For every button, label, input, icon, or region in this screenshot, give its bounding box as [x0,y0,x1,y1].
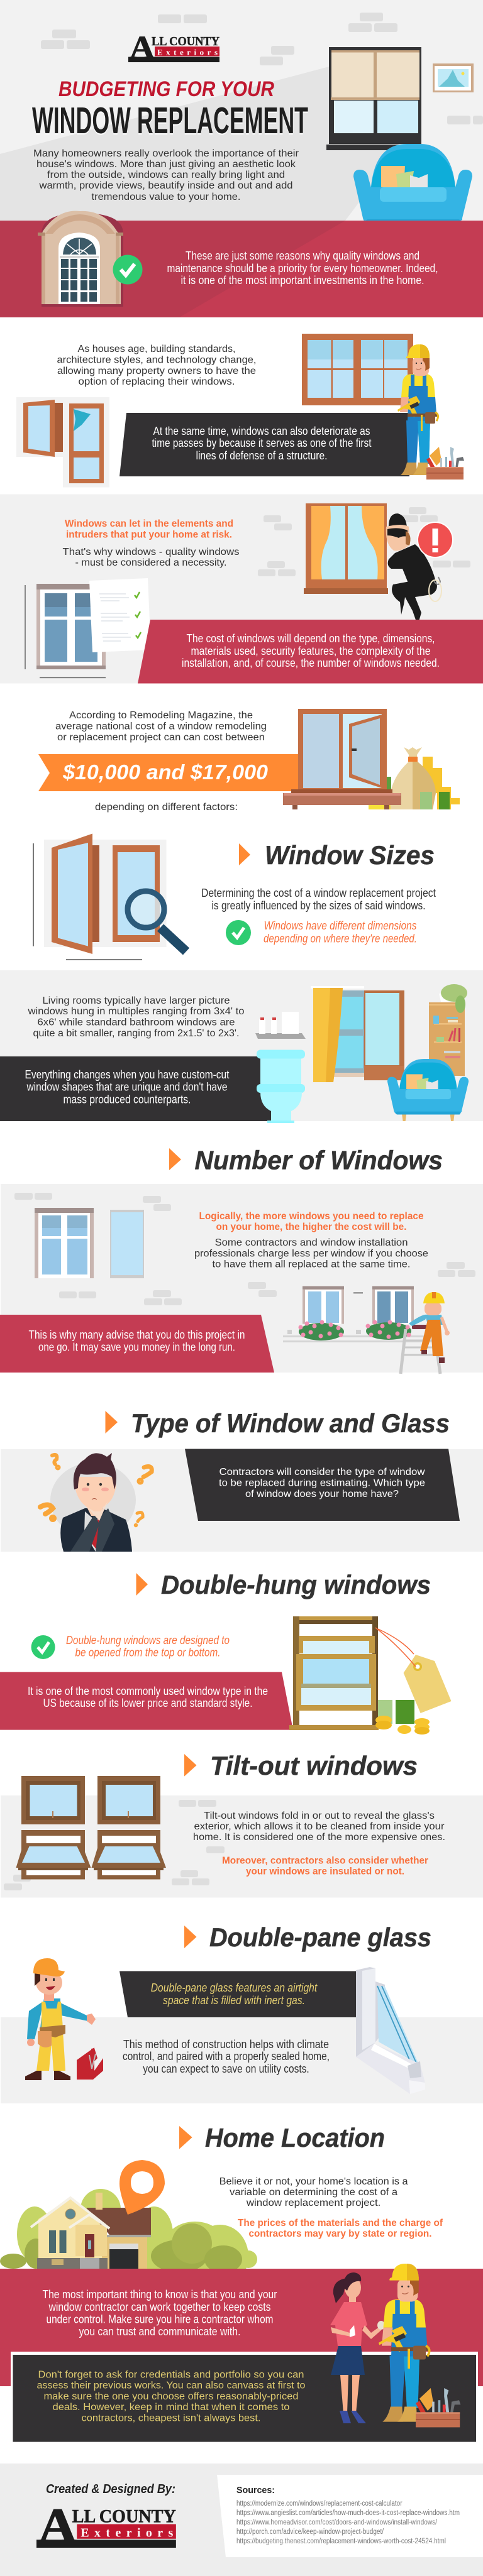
title [32,77,308,143]
text: insulated or not: your windows are insulated or not. [246,1866,404,1877]
illustration: arched window [38,211,123,307]
callout: dark inert gas box [119,1971,357,2017]
panel: double-pane background [1,2017,483,2103]
red band text [167,249,438,287]
illustration: house with trees [0,2189,257,2288]
title: BUDGETING FOR YOUR [58,77,274,101]
heading: tilt-out windows: Tilt-out windows [210,1751,418,1780]
callout: dark contractors box: Contractors will consider the type of window [219,1467,425,1477]
red band text: maintenance should be a priority for every homeowner. Indeed, [167,262,438,275]
text: sources: http://porch.com/advice/keep-window-project-budget/ [236,2528,384,2536]
text: as houses age: architecture styles, and technology change, [57,354,257,366]
text: different dimensions: depending on where they're needed. [264,932,417,945]
heading: double-hung windows: Double-hung windows [161,1570,431,1599]
logo: All County Exteriors footer: Exteriors [80,2526,174,2540]
text: contractors charge less: professionals charge less per window if you choose [194,1248,428,1259]
text: tilt-out description: home. It is considered one of the more expensive ones. [193,1832,445,1843]
illustration: window sizes [33,833,166,960]
panel: security section background [0,494,483,684]
illustration: woman homeowner [330,2272,385,2423]
logo: All County Exteriors footer: LL COUNTY [72,2506,176,2526]
text: tilt-out description [193,1811,445,1843]
illustration: two windows [35,1208,144,1278]
text: designed to be opened [66,1634,230,1659]
panel: type of window background [1,1449,483,1552]
text: work together [43,2288,277,2338]
intro text: tremendous value to your home. [92,192,240,202]
text: believe it or not: Believe it or not, your home's location is a [219,2176,408,2187]
heading: created and designed by: Created & Designed By: [46,2482,175,2496]
text: according to remodeling magazine: or replacement project can can cost between [57,732,265,743]
heading: double-pane glass: Double-pane glass [209,1922,431,1952]
illustration: open window on sill [283,709,401,809]
heading: number of windows: Number of Windows [195,1146,443,1175]
text: as houses age: allowing many property owners to have the [57,366,256,376]
intro text: from the outside, windows can really bring light and [47,170,285,180]
bricks: header wall [41,13,483,124]
panel: header background [0,0,483,221]
text: determining cost: is greatly influenced by the sizes of said windows. [211,899,425,912]
illustration: worker with orange hard hat [25,1958,96,2080]
text: believe it or not: variable on determining the cost of a [230,2187,397,2198]
text: different dimensions [264,919,417,945]
illustration: facade with flower boxes [283,1286,434,1342]
intro text: warmth, provide views, beautify inside and out and add [38,180,293,191]
text: prices vary: The prices of the materials and the charge of [238,2218,443,2228]
text: different dimensions: Windows have different dimensions [264,919,416,932]
text: believe it or not [219,2176,408,2208]
illustration: small armchair [387,1059,469,1121]
text: prices vary: contractors may vary by state or region. [249,2228,431,2239]
illustration: toilet [257,1050,305,1123]
text: logically [199,1211,424,1232]
illustration: window with shade [326,47,421,150]
text: logically: Logically, the more windows you need to replace [199,1211,424,1222]
callout: red cost box: materials used, security features, the complexity of the [191,645,430,657]
text: according to remodeling magazine [55,710,267,743]
bricks: tilt-out wall [4,1800,225,1890]
callout: red commonly used box: US because of its lower price and standard style. [43,1697,253,1709]
text: designed to be opened: be opened from the top or bottom. [75,1647,220,1659]
text: according to remodeling magazine: According to Remodeling Magazine, the [69,710,253,721]
text: logically: on your home, the higher the cost will be. [216,1222,406,1232]
callout: dark inert gas box: Double-pane glass features an airtight [151,1981,318,1994]
callout: dark contractors box: to be replaced during estimating. Which type [219,1478,425,1488]
illustration: bathroom shelf [255,1012,306,1039]
logo: All County Exteriors: A [130,30,155,66]
heading: type of window and glass: Type of Window and Glass [131,1408,450,1438]
icon: location pin [119,2160,165,2215]
icon: question marks [40,1455,152,1526]
logo: All County Exteriors: LL COUNTY [152,35,220,48]
text: depending on factors: depending on different factors: [95,802,238,813]
text: contractors charge less: to have them all replaced at the same time. [213,1259,410,1270]
text: work together: The most important thing to know is that you and your [43,2288,277,2301]
text: intruders warning: Windows can let in the elements and [65,518,233,529]
text: living rooms: windows hung in multiples ranging from 3x4' to [27,1006,245,1017]
illustration: construction worker [397,344,438,475]
callout: red cost box [138,620,483,684]
title: WINDOW REPLACEMENT [32,100,308,141]
text: work together: window contractor can work together to keep costs [48,2301,270,2313]
text: designed to be opened: Double-hung windows are designed to [66,1634,230,1647]
illustration: burglar [386,513,441,625]
heading: window sizes: Window Sizes [265,840,435,870]
illustration: checklist paper [89,578,151,652]
heading: home location: Home Location [205,2123,385,2152]
logo: All County Exteriors: Exteriors [157,48,218,57]
intro text: Many homeowners really overlook the importance of their [33,148,299,159]
illustration: price tag and money [375,1628,452,1735]
panel: tilt-out background [1,1795,483,1898]
callout: red cost box: The cost of windows will depend on the type, dimensions, [186,632,435,645]
illustration: worker on ladder [401,1292,450,1374]
text: contractors charge less [194,1237,428,1270]
text: tilt-out description: Tilt-out windows fold in or out to reveal the glass's [204,1811,435,1821]
text: insulated or not: Moreover, contractors also consider whether [222,1855,428,1866]
callout: dark inert gas box: space that is filled with inert gas. [163,1994,305,2007]
text: prices vary [238,2218,443,2239]
text: sources: https://budgeting.thenest.com/replacement-windows-worth-cost-24524.html [236,2538,446,2545]
callout: dark box deterioration: At the same time, windows can also deteriorate as [153,425,370,437]
illustration: window with curtains [304,503,388,594]
red band text: it is one of the most important investments in the home. [181,274,424,287]
illustration: toolbox [426,447,464,480]
text: according to remodeling magazine: average national cost of a window remodeling [55,721,267,732]
callout: red commonly used box [0,1672,293,1730]
text: sources: Sources: [236,2485,275,2496]
text: determining cost: Determining the cost of a window replacement project [201,887,436,899]
text: sources [236,2485,460,2545]
illustration: wooden window [302,334,413,405]
text: sources: https://modernize.com/windows/replacement-cost-calculator [236,2500,402,2507]
text: as houses age: option of replacing their windows. [78,376,235,387]
logo: All County Exteriors footer: A [38,2499,77,2553]
callout: red commonly used box: It is one of the most commonly used window type in the [28,1685,268,1697]
illustration: tilt-out windows [16,1776,166,1879]
callout: dark contractors box: of window does your home have? [245,1489,399,1499]
illustration: contractor [379,2264,430,2422]
panel: room sizes background [0,970,483,1121]
icon: alert [417,522,453,558]
illustration: living room window with curtain [311,986,404,1082]
text: intruders warning [65,518,233,540]
panel: red intro band [0,211,483,317]
illustration: blue armchair [353,144,472,233]
icon: green check [31,1635,55,1659]
callout: dark credentials box [11,2352,478,2442]
text: living rooms: Living rooms typically have larger picture [43,995,230,1006]
bricks: number of windows wall [14,1193,475,1305]
text: climate control [123,2038,330,2075]
callout: red advise box: one go. It may save you money in the long run. [38,1341,235,1354]
illustration: bookshelf and plant [429,984,467,1076]
intro text: house's windows. More than just giving an aesthetic look [36,159,296,170]
text: necessity [63,547,240,568]
text: necessity: That's why windows - quality windows [63,547,240,557]
callout: dark box deterioration: lines of defense of a structure. [196,449,327,462]
text: climate control: you can expect to save on utility costs. [143,2063,309,2075]
callout: dark contractors box [185,1449,460,1521]
text: tilt-out description: exterior, which allows it to be cleaned from inside your [194,1821,444,1832]
callout: dark custom-cut box [0,1056,274,1121]
callout: dark credentials box: Don't forget to ask for credentials and portfolio so you can [38,2369,304,2381]
text: as houses age [57,344,257,387]
text: living rooms: quite a bit smaller, ranging from 2x1.5' to 2x3'. [33,1028,239,1039]
icon: green check [226,920,251,945]
illustration: damaged windows [16,397,109,488]
text: intruders warning: intruders that put your home at risk. [66,529,232,540]
callout: red cost box: installation, and, of course, the number of windows needed. [182,657,440,669]
text: sources: https://www.homeadvisor.com/cost/doors-and-windows/install-windows/ [236,2519,438,2526]
intro text [33,148,299,202]
panel: number of windows background [1,1184,483,1373]
text: as houses age: As houses age, building standards, [78,344,235,354]
panel: red final band [0,2269,483,2386]
callout: dark credentials box: deals. However, keep in mind that when it comes to [53,2402,289,2413]
panel: footer [0,2464,483,2576]
illustration: toolbox [416,2388,460,2427]
callout: dark credentials box: contractors, cheapest isn't always best. [82,2413,260,2424]
illustration: thinking man [50,1453,136,1552]
illustration: double-hung window [289,1616,379,1730]
callout: red advise box [0,1315,274,1373]
logo: All County Exteriors [128,30,220,66]
callout: red advise box: This is why many advise that you do this project in [29,1329,245,1341]
callout: dark custom-cut box: window shapes that are unique and don't have [26,1081,227,1093]
illustration: red toolbox [77,2047,103,2080]
callout: dark box deterioration: time passes by because it serves as one of the first [152,437,371,449]
callout: dark box deterioration [119,413,409,476]
bricks: security wall [258,507,470,576]
text: contractors charge less: Some contractors and window installation [215,1237,408,1248]
callout: dark custom-cut box: mass produced counterparts. [63,1093,191,1106]
callout: dark credentials box: assess their previous works. You can also canvass at first to [36,2381,306,2391]
text: insulated or not [222,1855,428,1877]
text: believe it or not: window replacement project. [246,2198,380,2208]
text: necessity: - must be considered a necessity. [75,557,226,568]
icon: magnifying glass [128,891,186,951]
callout: dark custom-cut box: Everything changes when you have custom-cut [25,1068,229,1081]
red band text: These are just some reasons why quality windows and [186,249,419,262]
text: living rooms [27,995,245,1039]
text: work together: you can trust and communicate with. [79,2325,240,2338]
text: living rooms: 6x6' while standard bathroom windows are [38,1017,235,1028]
illustration: money [369,747,460,809]
illustration: measured window [25,584,106,677]
banner: cost range [38,754,302,791]
text: climate control: control, and paired with a properly sealed home, [123,2050,330,2063]
text: climate control: This method of construction helps with climate [123,2038,329,2051]
text: determining cost [201,887,436,912]
icon: green check [113,255,142,284]
callout: dark credentials box: make sure the one you choose offers reasonably-priced [44,2391,298,2402]
text: work together: under control. Make sure you hire a contractor whom [47,2313,273,2325]
illustration: window cross-section [356,1967,425,2094]
logo: All County Exteriors footer [36,2499,176,2553]
banner: cost range: $10,000 and $17,000 [62,760,269,784]
illustration: framed picture [433,63,474,92]
title: WINDOW REPLACEMENT [32,101,308,143]
